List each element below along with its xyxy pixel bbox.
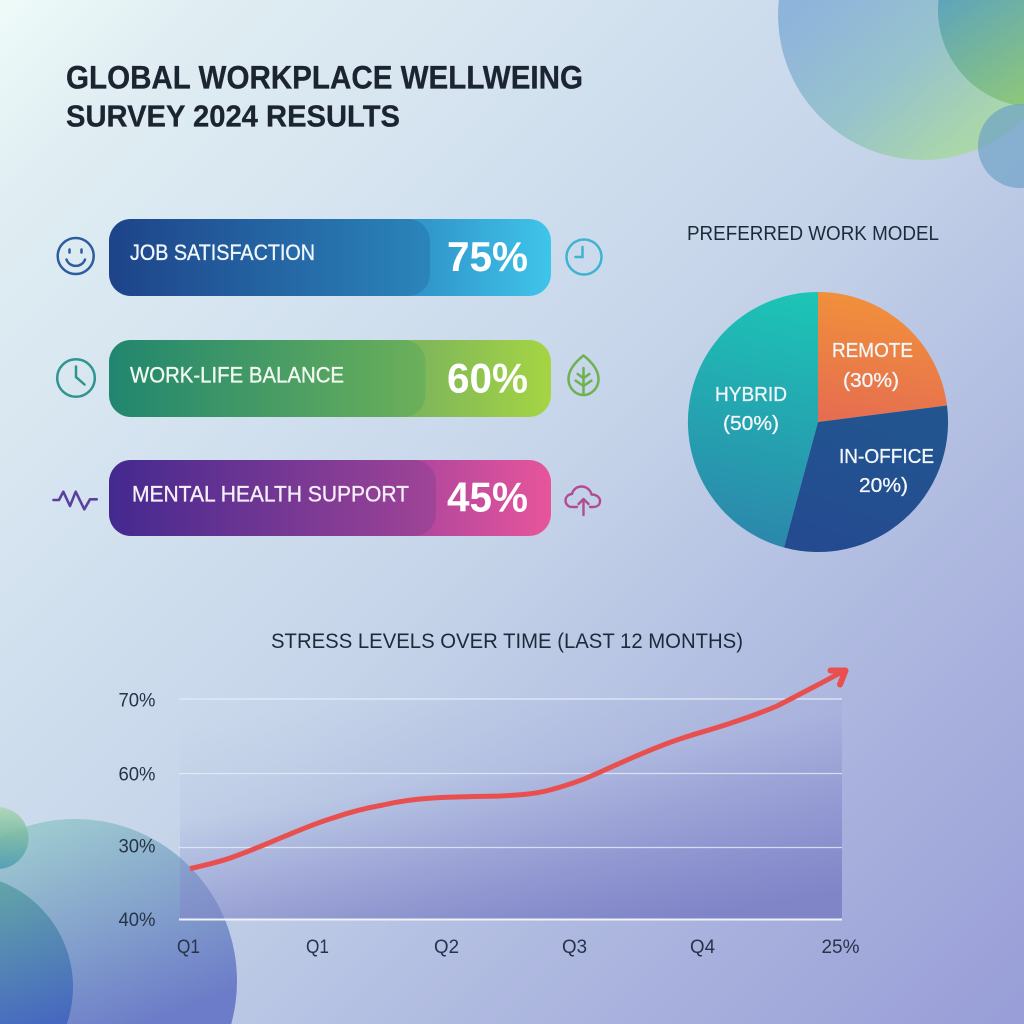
x-axis labels: Q2	[434, 937, 459, 958]
metric bar: job satisfaction: 75%	[447, 233, 528, 280]
icon: clock, light blue	[566, 240, 602, 274]
metric bar: work-life balance	[109, 340, 551, 417]
decorative circles: top right	[778, 0, 1024, 188]
chart area fill	[180, 699, 842, 919]
y-axis labels	[118, 690, 156, 931]
title: GLOBAL WORKPLACE WELLWEING	[66, 60, 583, 96]
y-axis labels: 60%	[118, 764, 156, 786]
x-axis labels: Q4	[690, 937, 715, 958]
pie labels: 20%)	[859, 475, 908, 497]
pie labels	[715, 340, 934, 497]
x-axis labels: Q1	[177, 937, 200, 958]
icon: cloud upload	[566, 486, 600, 515]
slice: in-office	[784, 406, 948, 552]
x-axis labels: 25%	[822, 937, 860, 958]
x-axis labels: Q1	[306, 937, 329, 958]
pie labels: (30%)	[843, 370, 899, 392]
icon: leaf	[568, 356, 598, 395]
pie labels: (50%)	[723, 413, 779, 435]
line chart: stress levels	[118, 670, 860, 958]
slice: hybrid	[688, 292, 818, 548]
x-axis labels	[177, 937, 860, 958]
icon: smiley	[58, 238, 94, 274]
grid lines	[179, 699, 842, 920]
metric bar: job satisfaction: JOB SATISFACTION	[130, 240, 315, 265]
pie labels: REMOTE	[832, 340, 913, 362]
pie chart: preferred work model	[688, 292, 948, 552]
title: SURVEY 2024 RESULTS	[66, 98, 400, 134]
icon: clock, teal	[57, 359, 95, 397]
metric bar: mental health support	[109, 460, 551, 536]
pie chart heading: PREFERRED WORK MODEL	[687, 222, 939, 245]
metric bar: mental health support: 45%	[447, 474, 528, 520]
decorative circles: bottom left	[0, 807, 237, 1024]
metric bar: work-life balance: WORK-LIFE BALANCE	[130, 362, 344, 388]
title	[66, 60, 583, 134]
metric bar: job satisfaction	[109, 219, 551, 296]
icon: pulse wave	[54, 492, 97, 509]
line chart heading: STRESS LEVELS OVER TIME (LAST 12 MONTHS)	[271, 630, 743, 653]
trend line with arrow	[190, 670, 846, 869]
x-axis labels: Q3	[562, 937, 587, 958]
slice: remote	[818, 292, 947, 422]
metric bar: mental health support: MENTAL HEALTH SUPPORT	[132, 482, 409, 506]
pie labels: IN-OFFICE	[839, 446, 934, 468]
y-axis labels: 30%	[118, 836, 156, 858]
y-axis labels: 70%	[118, 690, 156, 712]
y-axis labels: 40%	[118, 910, 156, 931]
metric bar: work-life balance: 60%	[447, 354, 528, 402]
pie labels: HYBRID	[715, 384, 787, 406]
